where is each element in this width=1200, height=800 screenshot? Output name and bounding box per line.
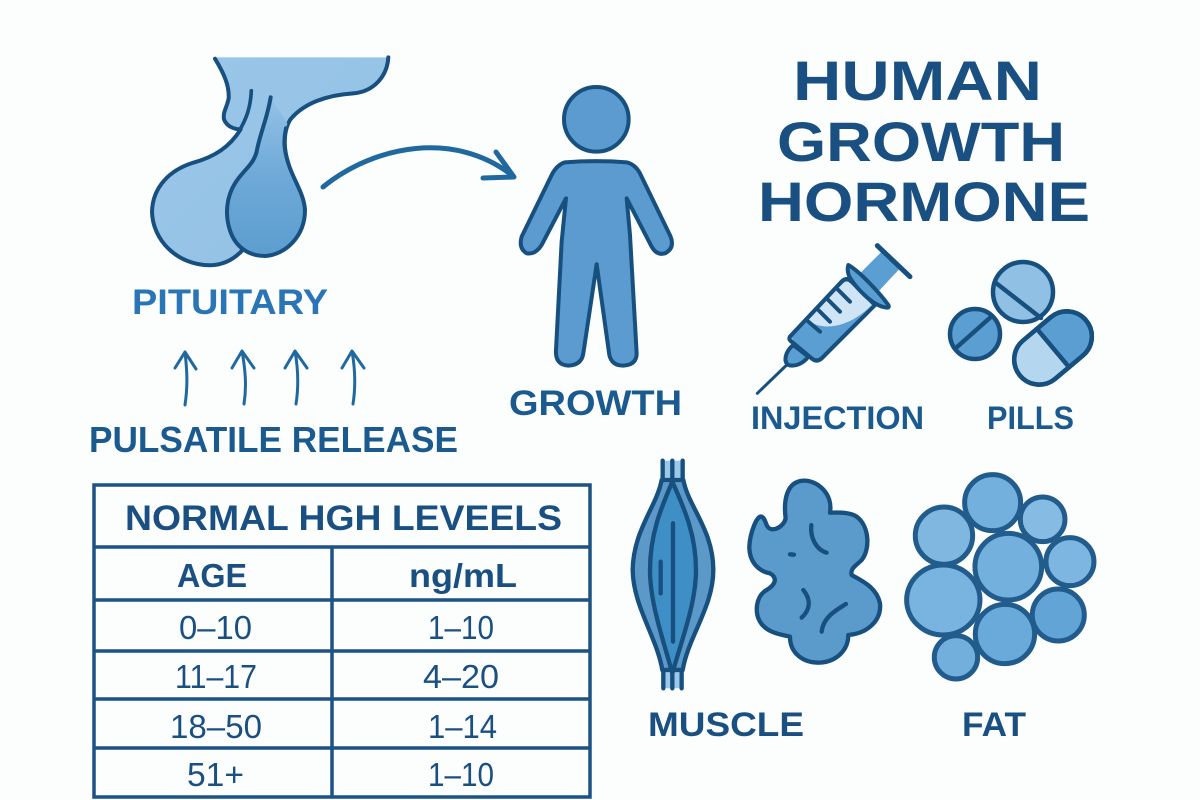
icon: fat cells <box>907 475 1094 679</box>
table rows: 51+ <box>187 756 244 793</box>
table rows: 18–50 <box>170 708 262 745</box>
label: growth: GROWTH <box>509 384 682 423</box>
icon: person <box>521 87 672 366</box>
title: GROWTH <box>777 110 1065 173</box>
table rows: 0–10 <box>179 609 252 646</box>
arrow: pituitary to growth <box>323 148 514 187</box>
icon: pills <box>950 262 1102 395</box>
table rows: 1–10 <box>428 609 494 646</box>
title: HUMAN <box>793 49 1042 112</box>
icon: syringe <box>757 246 910 393</box>
table rows <box>170 557 517 793</box>
icon: pituitary gland <box>152 57 388 265</box>
arrows: pulsatile release <box>175 351 364 405</box>
label: pills: PILLS <box>987 400 1074 436</box>
label: fat: FAT <box>962 706 1026 744</box>
icon: muscle <box>633 461 713 688</box>
title <box>758 49 1090 233</box>
table rows: 4–20 <box>423 658 499 695</box>
label: pituitary: PITUITARY <box>132 283 328 322</box>
label: muscle: MUSCLE <box>648 706 804 744</box>
table rows: 11–17 <box>175 658 257 695</box>
table: normal HGH levels <box>94 485 590 797</box>
table rows: 1–10 <box>428 756 494 793</box>
table rows: 1–14 <box>428 708 497 745</box>
icon: tissue <box>749 481 880 663</box>
title: HORMONE <box>758 170 1090 233</box>
table rows: ng/mL <box>409 557 517 594</box>
label: pulsatile release: PULSATILE RELEASE <box>89 419 458 460</box>
label: injection: INJECTION <box>751 400 924 436</box>
table title: NORMAL HGH LEVEELS <box>125 499 562 538</box>
table rows: AGE <box>177 557 247 594</box>
